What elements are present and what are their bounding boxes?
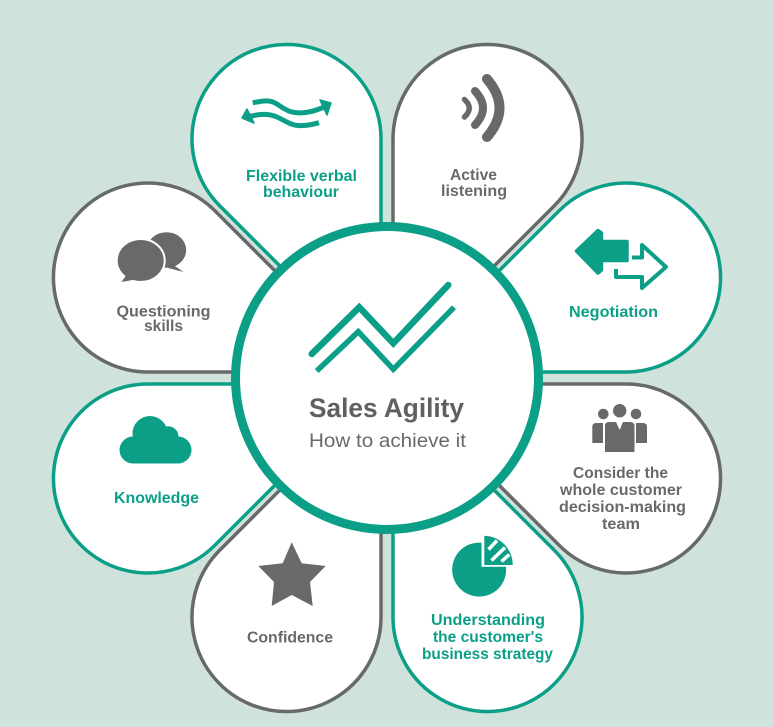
panel: Consider the whole customer decision-making team	[398, 384, 721, 573]
petal outline	[192, 389, 381, 712]
label: skills	[144, 318, 183, 335]
icon: cloud	[120, 416, 192, 464]
petal outline	[192, 44, 381, 367]
label	[441, 167, 507, 200]
label: whole customer	[559, 482, 682, 499]
icon: opposing arrows	[576, 230, 666, 288]
panel: Confidence	[192, 389, 381, 712]
label: behaviour	[263, 184, 339, 201]
panel: Questioning skills	[53, 183, 376, 372]
icon: speech bubbles	[117, 232, 186, 282]
circle outline	[236, 226, 538, 530]
panel: Active listening	[393, 44, 582, 367]
panel: Understanding the customer's business strategy	[393, 389, 582, 712]
label: Consider the	[573, 465, 668, 482]
label: team	[602, 516, 640, 533]
heading: Sales Agility	[309, 393, 464, 423]
panel: Negotiation	[398, 183, 721, 372]
subheading: How to achieve it	[309, 431, 467, 452]
label: listening	[441, 183, 507, 200]
icon: group of people	[592, 404, 647, 452]
icon: star	[258, 542, 326, 606]
petal outline	[398, 384, 721, 573]
label: Confidence	[247, 630, 333, 646]
label	[559, 465, 686, 533]
label: Knowledge	[114, 490, 199, 507]
label	[116, 304, 210, 335]
icon: zigzag trend lines	[312, 285, 454, 371]
panel: Knowledge	[53, 384, 376, 573]
petal outline	[398, 183, 721, 372]
label: Negotiation	[569, 304, 658, 321]
petal outline	[53, 384, 376, 573]
label: the customer's	[433, 629, 543, 646]
icon: pie chart	[452, 536, 513, 597]
panel: central circle	[236, 226, 538, 530]
label: Understanding	[431, 612, 545, 629]
label: Active	[450, 167, 497, 184]
label: Flexible verbal	[246, 168, 357, 185]
label: decision-making	[559, 499, 686, 516]
petal outline	[53, 183, 376, 372]
petal outline	[393, 44, 582, 367]
label	[422, 612, 553, 663]
label	[246, 168, 357, 201]
petal outline	[393, 389, 582, 712]
panel: Flexible verbal behaviour	[192, 44, 381, 367]
icon: two wavy arrows	[242, 100, 331, 126]
label: Questioning	[116, 304, 210, 320]
label: business strategy	[422, 646, 553, 663]
icon: sound waves	[464, 79, 500, 137]
